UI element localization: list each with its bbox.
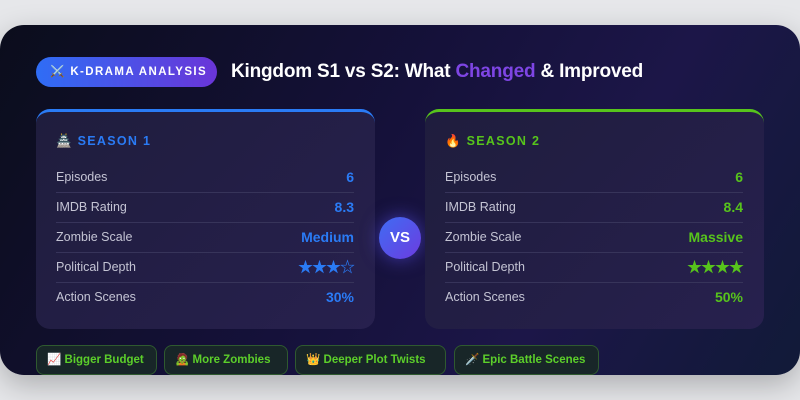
badge — [36, 57, 217, 87]
panel: season 2: 8.4 — [724, 199, 743, 215]
panel: season 1: ★★★☆ — [298, 259, 354, 276]
vs circle — [379, 217, 421, 259]
panel: season 2: Episodes — [445, 170, 496, 184]
panel: season 2: ★★★★ — [687, 259, 743, 276]
panel: season 1: IMDB Rating — [56, 200, 127, 214]
panel: season 2: Zombie Scale — [445, 230, 521, 244]
chip: budget — [36, 345, 157, 375]
panel: season 1 — [36, 109, 375, 329]
chip: battle: 🗡️ Epic Battle Scenes — [465, 354, 585, 366]
chip: plot twists: 👑 Deeper Plot Twists — [306, 354, 426, 366]
panel: season 1: Action Scenes — [56, 290, 136, 304]
panel: season 2: Political Depth — [445, 260, 525, 274]
panel: season 1: Medium — [301, 229, 354, 245]
title: Kingdom S1 vs S2: What Changed & Improved — [231, 61, 643, 82]
heading: season 1: 🏯 SEASON 1 — [56, 134, 151, 148]
chip: zombies — [164, 345, 288, 375]
panel: season 1: Political Depth — [56, 260, 136, 274]
chip: zombies: 🧟 More Zombies — [175, 354, 270, 366]
panel: season 1: 6 — [346, 169, 354, 185]
panel: season 2 — [425, 109, 764, 329]
panel: season 2: 50% — [715, 289, 743, 305]
panel: season 2: Action Scenes — [445, 290, 525, 304]
panel: season 2: 6 — [735, 169, 743, 185]
panel: season 2: Massive — [689, 229, 743, 245]
chip: plot twists — [295, 345, 446, 375]
panel: season 2: IMDB Rating — [445, 200, 516, 214]
panel: season 1: 8.3 — [335, 199, 354, 215]
panel: season 1: Episodes — [56, 170, 107, 184]
heading: season 2: 🔥 SEASON 2 — [445, 134, 540, 148]
vs circle: VS — [390, 229, 410, 246]
chip: budget: 📈 Bigger Budget — [47, 354, 144, 366]
panel: season 1: 30% — [326, 289, 354, 305]
badge: ⚔️ K-DRAMA ANALYSIS — [50, 66, 207, 78]
chip: battle — [454, 345, 599, 375]
panel: season 1: Zombie Scale — [56, 230, 132, 244]
